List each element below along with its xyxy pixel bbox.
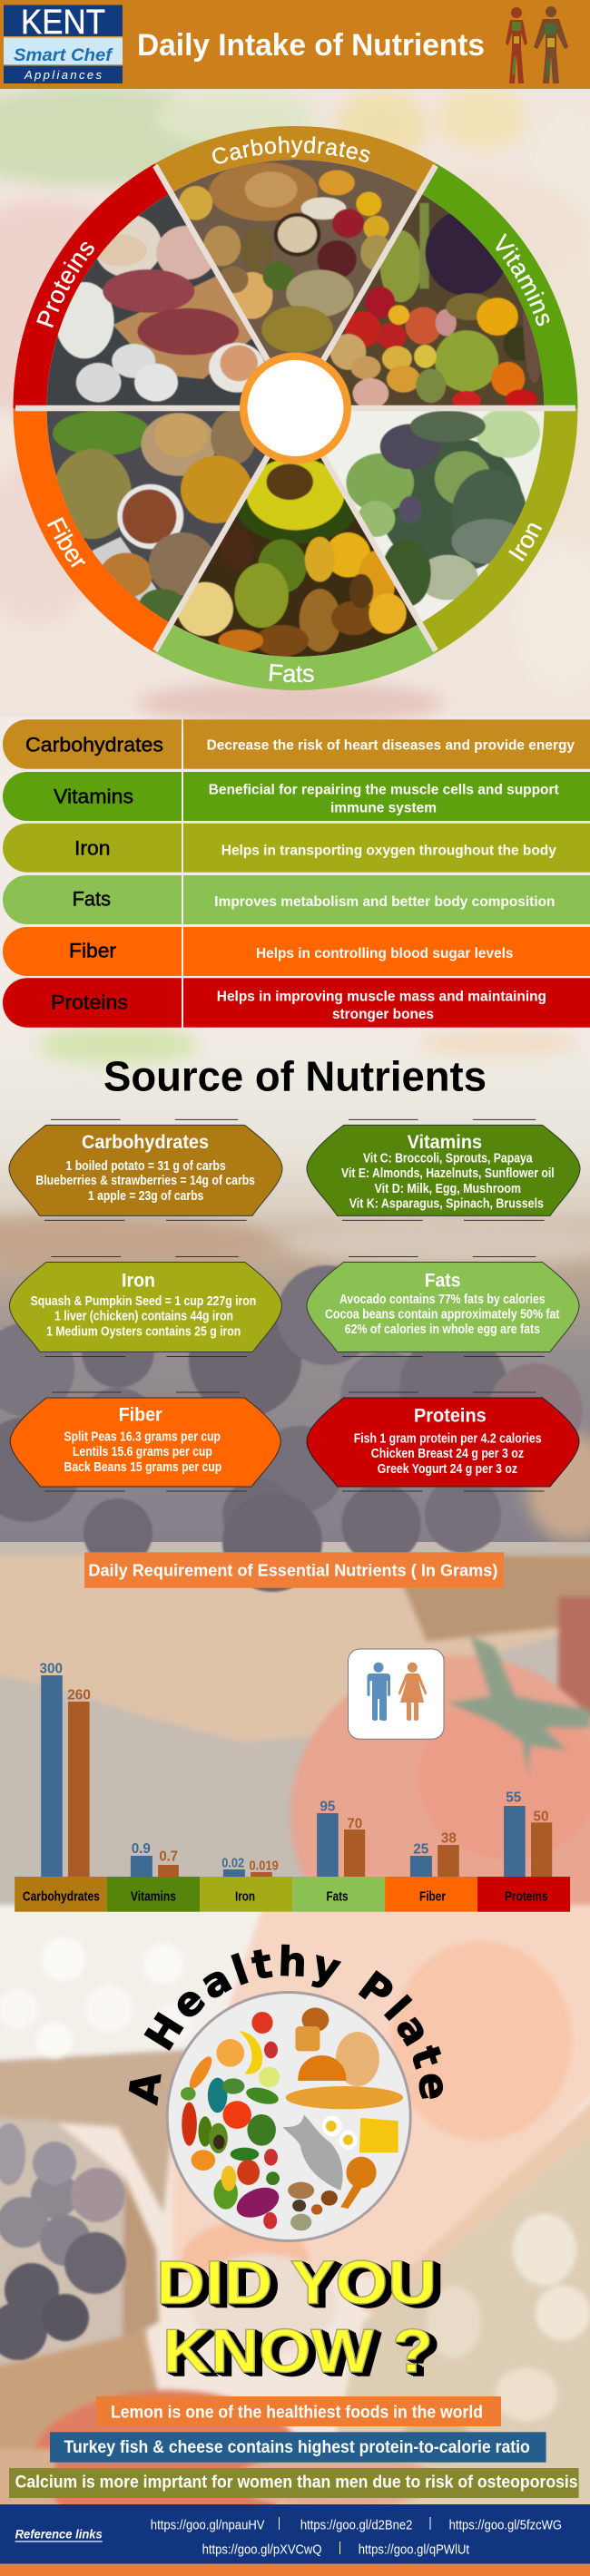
bars: fiber 25 and 38: 38 [441, 1830, 457, 1846]
legend: male and female icons [349, 1649, 444, 1739]
bars: proteins 55 and 50: 55 [506, 1790, 521, 1805]
table row: fats [3, 875, 590, 924]
header banner [0, 0, 590, 89]
source panel: vitamins: Vitamins [408, 1131, 482, 1153]
chart category axis: Carbohydrates [23, 1888, 100, 1904]
source panel: vitamins: Vit D: Milk, Egg, Mushroom [374, 1182, 521, 1196]
reference urls: https://goo.gl/npauHV [151, 2518, 265, 2532]
table row: proteins [3, 978, 590, 1028]
footer: reference links [0, 2504, 590, 2576]
bars: vitamins 0.9 and 0.7: 0.7 [159, 1849, 178, 1865]
source panel: vitamins [307, 1119, 580, 1220]
table row: carbohydrates [3, 719, 590, 769]
fact: calcium [9, 2468, 579, 2498]
table row: vitamins [3, 772, 590, 821]
wheel band: iron: Iron [508, 523, 543, 562]
wheel band: fiber: Fiber [47, 517, 85, 568]
food photo: vitamins [326, 194, 545, 405]
wheel band: fiber [13, 408, 169, 653]
icon: female figure [398, 1663, 427, 1721]
icon: two food-filled body figures [506, 6, 568, 83]
nutrient wheel [13, 126, 577, 690]
chart category axis: Iron [235, 1888, 255, 1904]
table row: vitamins: Beneficial for repairing the muscle cells and support [209, 783, 559, 798]
source panel: vitamins: Vit C: Broccoli, Sprouts, Papaya [363, 1151, 533, 1166]
table row: proteins: Proteins [51, 991, 128, 1014]
logo: KENT Smart Chef Appliances: Appliances [24, 68, 102, 82]
table row: carbohydrates: Carbohydrates [25, 733, 163, 756]
heading: did you know: DID YOU [156, 2248, 437, 2317]
heading: did you know [156, 2248, 437, 2386]
fact: lemon [96, 2396, 501, 2426]
table row: carbohydrates: Decrease the risk of heart diseases and provide energy [207, 738, 575, 754]
bars: fiber 25 and 38: 25 [413, 1841, 428, 1857]
source panel: iron: 1 Medium Oysters contains 25 g iron [46, 1324, 241, 1339]
source panel: carbohydrates: Blueberries & strawberries = 14g of carbs [35, 1174, 255, 1188]
source panel: fiber: Back Beans 15 grams per cup [64, 1460, 221, 1475]
source panel: iron [9, 1257, 281, 1357]
table row: fiber: Helps in controlling blood sugar levels [256, 946, 514, 961]
bars: iron 0.02 and 0.019: 0.02 [221, 1855, 244, 1870]
table row: vitamins: Vitamins [54, 785, 133, 808]
source panel: fats: Fats [425, 1270, 461, 1292]
source panel: proteins [307, 1392, 579, 1491]
logo: KENT Smart Chef Appliances [4, 4, 123, 83]
table row: fats: Improves metabolism and better body composition [214, 894, 556, 910]
wheel band: vitamins [422, 163, 577, 408]
table row: proteins: stronger bones [332, 1007, 434, 1022]
chart category axis: Fiber [419, 1888, 446, 1904]
wheel band: carbohydrates [154, 126, 437, 192]
source panel: iron: 1 liver (chicken) contains 44g iron [54, 1309, 233, 1323]
source panel: proteins: Greek Yogurt 24 g per 3 oz [378, 1462, 517, 1477]
source panel: carbohydrates: 1 boiled potato = 31 g of carbs [65, 1159, 226, 1174]
source panel: fats [307, 1257, 579, 1357]
wheel band: proteins [13, 163, 169, 408]
wheel spokes [15, 165, 575, 651]
source panel: fiber [10, 1392, 280, 1491]
table row: proteins: Helps in improving muscle mass and maintaining [217, 989, 546, 1004]
wheel band: vitamins: Vitamins [496, 232, 550, 327]
chart title: Daily Requirement of Essential Nutrients ( In Grams) [88, 1562, 497, 1580]
bars: carbohydrates 300 and 260: 260 [67, 1687, 91, 1703]
source panel: fiber: Split Peas 16.3 grams per cup [64, 1430, 221, 1445]
bars: iron 0.02 and 0.019 [221, 1855, 279, 1877]
illustration: healthy plate of food [167, 1992, 410, 2240]
bars: carbohydrates 300 and 260 [40, 1661, 91, 1877]
source panel: fats: 62% of calories in whole egg are fats [345, 1322, 540, 1337]
source panel: proteins: Fish 1 gram protein per 4.2 calories [354, 1431, 542, 1446]
source panel: fats: Avocado contains 77% fats by calories [339, 1293, 546, 1307]
wheel band: iron [422, 408, 577, 653]
wheel hub [240, 352, 351, 464]
heading: did you know: KNOW ? [162, 2317, 433, 2386]
table row: iron: Helps in transporting oxygen throughout the body [221, 843, 556, 858]
heading: a healthy plate (curved): A Healthy Plate [129, 1945, 443, 2106]
food photo: fiber [47, 411, 265, 622]
source panel: vitamins: Vit K: Asparagus, Spinach, Brussels [349, 1197, 544, 1212]
fact: lemon: Lemon is one of the healthiest foods in the world [111, 2404, 483, 2423]
chart category axis [15, 1877, 570, 1912]
plate foods: fruit and vegetables [181, 2012, 286, 2230]
reference urls: https://goo.gl/d2Bne2 [300, 2518, 412, 2532]
bars: proteins 55 and 50: 50 [534, 1810, 549, 1825]
wheel band: carbohydrates: Carbohydrates [212, 136, 370, 164]
chart category axis: Vitamins [131, 1888, 176, 1904]
chart category axis: Proteins [505, 1888, 548, 1904]
source panel: iron: Squash & Pumpkin Seed = 1 cup 227g iron [31, 1294, 256, 1309]
bar chart: daily requirement [15, 1661, 570, 1912]
source panel: fiber: Fiber [119, 1404, 162, 1426]
food photo: proteins [47, 194, 265, 405]
source panel: iron: Iron [122, 1270, 155, 1292]
title: Daily Intake of Nutrients [137, 28, 485, 63]
source panel: proteins: Proteins [414, 1404, 487, 1426]
fact: turkey fish and cheese: Turkey fish & cheese contains highest protein-to-calorie ratio [64, 2438, 530, 2457]
bars: fats 95 and 70: 95 [320, 1799, 335, 1814]
source panel: carbohydrates [9, 1119, 282, 1220]
reference urls: https://goo.gl/qPWlUt [359, 2542, 469, 2557]
chart title [84, 1552, 504, 1588]
source panel: carbohydrates: 1 apple = 23g of carbs [88, 1189, 203, 1204]
benefits table [3, 719, 590, 1028]
table row: iron: Iron [74, 836, 111, 859]
bars: proteins 55 and 50 [504, 1790, 552, 1877]
reference urls: https://goo.gl/pXVCwQ [202, 2542, 321, 2557]
wheel band: fats [154, 624, 437, 690]
bars: iron 0.02 and 0.019: 0.019 [249, 1859, 279, 1874]
bars: fats 95 and 70: 70 [347, 1816, 362, 1831]
table row: iron [3, 824, 590, 873]
logo: KENT Smart Chef Appliances: KENT [21, 4, 105, 42]
source panel: fiber: Lentils 15.6 grams per cup [73, 1445, 212, 1459]
bars: fiber 25 and 38 [410, 1830, 459, 1877]
table row: fats: Fats [73, 888, 111, 911]
food photo: carbohydrates [173, 160, 418, 359]
chart category axis: Fats [327, 1888, 349, 1904]
icon: male figure [367, 1663, 390, 1721]
table row: vitamins: immune system [330, 800, 437, 815]
fact: turkey fish and cheese [50, 2432, 546, 2463]
background detail layers [0, 1556, 590, 2535]
logo: KENT Smart Chef Appliances: Smart Chef [14, 46, 113, 65]
bars: carbohydrates 300 and 260: 300 [40, 1661, 63, 1676]
bars: vitamins 0.9 and 0.7: 0.9 [132, 1841, 151, 1857]
heading: source of nutrients: Source of Nutrients [103, 1052, 487, 1099]
food photo: iron [326, 411, 545, 622]
table row: fiber: Fiber [69, 940, 116, 962]
wheel band: proteins: Proteins [36, 241, 94, 328]
plate foods: grains, fish, dairy and protein [282, 2007, 403, 2230]
food photo: fats [173, 457, 418, 657]
reference links label: Reference links [15, 2527, 103, 2541]
source panel: vitamins: Vit E: Almonds, Hazelnuts, Sunflower oil [341, 1166, 555, 1181]
source panel: carbohydrates: Carbohydrates [82, 1131, 209, 1153]
table row: fiber [3, 927, 590, 976]
source panel: proteins: Chicken Breast 24 g per 3 oz [371, 1447, 524, 1461]
reference urls: https://goo.gl/5fzcWG [449, 2518, 562, 2532]
bars: vitamins 0.9 and 0.7 [131, 1841, 179, 1877]
reference urls [151, 2517, 562, 2557]
bars: fats 95 and 70 [317, 1799, 365, 1877]
wheel band: fats: Fats [269, 664, 314, 682]
